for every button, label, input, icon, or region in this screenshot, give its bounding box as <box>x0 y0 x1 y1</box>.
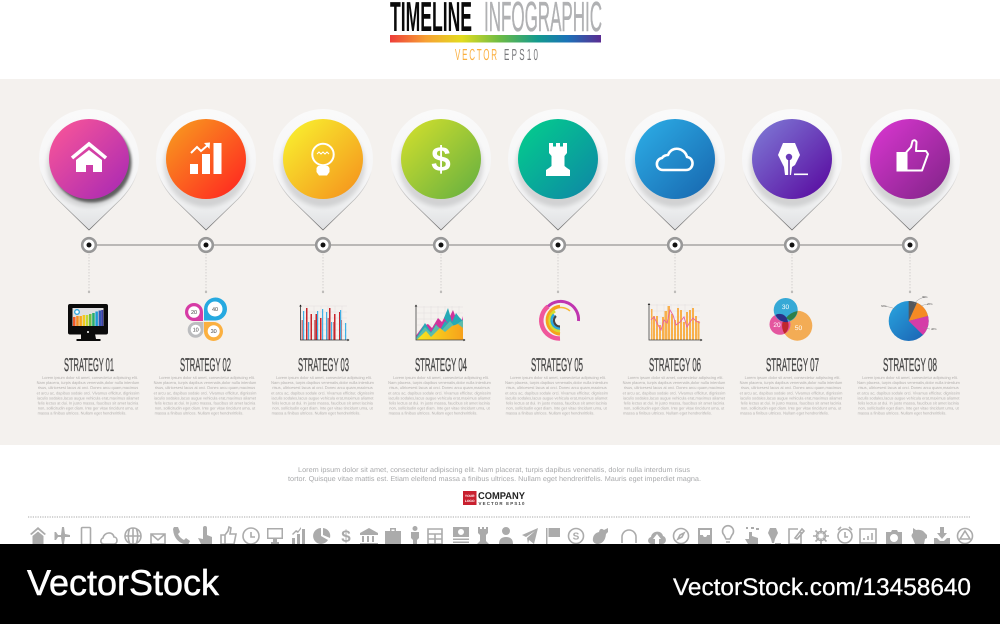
body text 5: Lorem ipsum dolor sit amet, consectetur adipiscing elit. <box>510 375 606 380</box>
strip icon: headphones <box>622 530 636 543</box>
text: STRATEGY 07 <box>766 354 819 375</box>
bottom paragraph: tortor. Quisque vitae mattis est. Etiam eleifend massa a finibus ultrices. Nullam eget hendreritfelis. Mauris eget imperdiet magna. <box>288 475 701 483</box>
chart 2: number bubbles: 30 <box>211 329 217 335</box>
strip icon: bird <box>593 528 608 544</box>
body text 8: felis lectus at dui. In justo massa, faucibus sit amet lacinia <box>858 400 960 406</box>
strip icon: paper plane <box>522 528 538 544</box>
body text 2: Nam placera, turpis dapibus venenatis,dolor nulla interdum <box>154 380 257 385</box>
strip icon: calculator <box>428 529 442 544</box>
chart 2: number bubbles: 10 <box>193 328 199 334</box>
icon: pen nib <box>778 143 808 176</box>
timeline axis line <box>89 244 910 246</box>
strip icon: phone <box>173 527 190 545</box>
subtitle: vector: VECTOR <box>455 47 497 64</box>
chart 2: number bubbles <box>185 298 227 341</box>
body text 2: felis lectus at dui. In justo massa, faucibus sit amet lacinia <box>155 400 256 406</box>
chart 8: pie chart with callouts: 50% <box>881 304 887 308</box>
dotted connectors <box>88 254 911 293</box>
chart 1: monitor with bars <box>68 304 108 341</box>
body text 6: massa a finibus ultrices. Nullam eget hendreritfelis. <box>623 411 712 416</box>
chart 4: layered area chart <box>415 304 466 341</box>
body text 8: iaculis sodales,lacus augue vehicula erat,maximus aliamet <box>858 395 960 400</box>
body text 2: Lorem ipsum dolor sit amet, consectetur adipiscing elit. <box>159 375 255 380</box>
strip icon: pen <box>768 528 781 544</box>
strip icon: flag <box>546 528 560 544</box>
body text 1: risus, ultricesest lacus at orci. Donec arcu quam,maximus <box>38 385 138 390</box>
icon: light bulb <box>312 144 334 176</box>
pin 4: dollar <box>391 109 491 230</box>
body text 3: felis lectus at dui. In justo massa, faucibus sit amet lacinia <box>272 400 374 406</box>
pin 3: light bulb <box>273 109 373 230</box>
strip icon: clock <box>243 528 259 544</box>
timeline node 2 <box>199 238 213 252</box>
title <box>390 0 602 64</box>
strip icon: cloud <box>101 533 117 544</box>
strip icon: note <box>789 529 804 544</box>
body text 1: Lorem ipsum dolor sit amet, consectetur adipiscing elit. <box>42 375 138 380</box>
body text 7: risus, ultricesest lacus at orci. Donec arcu quam,maximus <box>741 385 841 390</box>
pin 5: rook <box>508 109 608 230</box>
body text 3: Lorem ipsum dolor sit amet, consectetur adipiscing elit. <box>276 375 372 380</box>
timeline node 8 <box>903 238 917 252</box>
chart 7: venn diagram: 50 <box>795 325 802 332</box>
chart 7: venn diagram: 20 <box>773 322 781 329</box>
strip icon: person <box>411 526 419 545</box>
body text 8: risus, ultricesest lacus at orci. Donec arcu quam,maximus <box>858 385 959 390</box>
timeline node 5 <box>551 238 565 252</box>
icon strip <box>30 526 972 546</box>
body text 3: Nam placera, turpis dapibus venenatis,dolor nulla interdum <box>271 380 375 385</box>
strip icon: pie <box>313 528 330 544</box>
bottom paragraph <box>288 466 701 483</box>
body text 5: risus, ultricesest lacus at orci. Donec arcu quam,maximus <box>506 385 607 390</box>
body text 6: Nam placera, turpis dapibus venenatis,dolor nulla interdum <box>623 380 726 385</box>
body text 1: iaculis sodales,lacus augue vehicula erat,maximus aliamet <box>37 395 140 400</box>
company logo: LOGO <box>465 499 475 503</box>
icon: dollar sign: $ <box>431 140 451 179</box>
body text 1: felis lectus at dui. In justo massa, faucibus sit amet lacinia <box>38 400 139 406</box>
body text 4: Lorem ipsum dolor sit amet, consectetur adipiscing elit. <box>393 375 489 380</box>
body text 4: et arcu ac, dapibus sodale orci. Vivamus efficitur, dignissim <box>388 390 492 395</box>
chart 5: rainbow arc chart <box>541 301 579 339</box>
body text 2: massa a finibus ultrices. Nullam eget hendreritfelis. <box>155 411 243 416</box>
icon: chess rook <box>546 143 570 176</box>
body text 2: et arcu ac, dapibus sodale orci. Vivamus efficitur, dignissim <box>154 390 257 395</box>
chart 2: number bubbles: 40 <box>212 307 218 313</box>
body text 3: iaculis sodales,lacus augue vehicula erat,maximus aliamet <box>272 395 374 400</box>
body text 3: massa a finibus ultrices. Nullam eget hendreritfelis. <box>272 411 360 416</box>
strip icon: gear <box>813 528 829 544</box>
strip icon: bank <box>360 528 378 545</box>
strip icon: mail <box>151 534 165 544</box>
timeline node 7 <box>785 238 799 252</box>
body text 3: non, sollicitudin eget diam. Inte ger vitae tincidunt urna, ut <box>272 406 374 411</box>
strip icon: banknote <box>453 527 469 543</box>
chart 3: column chart <box>299 304 350 341</box>
company logo: YOUR <box>465 494 475 498</box>
strip icon: alarm clock <box>838 527 852 543</box>
body text 7: massa a finibus ultrices. Nullam eget hendreritfelis. <box>740 411 829 416</box>
strip icon: inbox <box>698 528 712 544</box>
rainbow bar <box>390 35 601 42</box>
strip icon: chart board <box>860 529 876 543</box>
strip icon: monitor <box>267 528 283 544</box>
strip icon: dollar: $ <box>341 527 351 546</box>
strip icon: briefcase <box>385 528 401 544</box>
company logo: COMPANY <box>478 491 525 502</box>
body text 5: Nam placera, turpis dapibus venenatis,dolor nulla interdum <box>505 380 609 385</box>
body text 8: Lorem ipsum dolor sit amet, consectetur adipiscing elit. <box>862 375 958 380</box>
body text 7: Nam placera, turpis dapibus venenatis,dolor nulla interdum <box>740 380 843 385</box>
body text 5: massa a finibus ultrices. Nullam eget hendreritfelis. <box>506 411 594 416</box>
timeline node 4 <box>434 238 448 252</box>
strip icon: coin: S <box>573 532 580 542</box>
body text 5: iaculis sodales,lacus augue vehicula erat,maximus aliamet <box>506 395 608 400</box>
dotted divider <box>28 516 971 518</box>
body text 4: non, sollicitudin eget diam. Inte ger vitae tincidunt urna, ut <box>389 406 491 411</box>
body text 3: risus, ultricesest lacus at orci. Donec arcu quam,maximus <box>272 385 373 390</box>
body text 8: Nam placera, turpis dapibus venenatis,dolor nulla interdum <box>857 380 961 385</box>
body text 4: risus, ultricesest lacus at orci. Donec arcu quam,maximus <box>389 385 490 390</box>
black footer band <box>0 544 1000 624</box>
strip icon: camera <box>886 530 902 544</box>
chart 6: bars with line <box>648 303 702 341</box>
body text 6: Lorem ipsum dolor sit amet, consectetur adipiscing elit. <box>628 375 723 380</box>
pin 7: pen nib <box>742 109 842 230</box>
chart 7: venn diagram <box>770 298 812 341</box>
strip icon: user <box>499 527 513 544</box>
pin 2: growth chart <box>156 109 256 230</box>
strip icon: compass <box>674 528 688 544</box>
chart 2: number bubbles: 20 <box>191 310 197 316</box>
strip icon: home <box>30 527 46 544</box>
body text 6: iaculis sodales,lacus augue vehicula erat,maximus aliamet <box>623 395 726 400</box>
body text 1: non, sollicitudin eget diam. Inte ger vitae tincidunt urna, ut <box>38 406 139 411</box>
strip icon: touch <box>198 526 212 544</box>
strip icon: bars <box>292 527 305 544</box>
body text 1: massa a finibus ultrices. Nullam eget hendreritfelis. <box>38 411 126 416</box>
body text 6: et arcu ac, dapibus sodale orci. Vivamus efficitur, dignissim <box>623 390 726 395</box>
body text 1: Nam placera, turpis dapibus venenatis,dolor nulla interdum <box>37 380 140 385</box>
body text 5: felis lectus at dui. In justo massa, faucibus sit amet lacinia <box>506 400 608 406</box>
icon: home <box>72 144 106 172</box>
strip icon: tablet <box>82 528 90 544</box>
text: STRATEGY 05 <box>531 354 583 375</box>
body text 6: risus, ultricesest lacus at orci. Donec arcu quam,maximus <box>624 385 724 390</box>
body text 7: iaculis sodales,lacus augue vehicula erat,maximus aliamet <box>740 395 843 400</box>
body text 4: felis lectus at dui. In justo massa, faucibus sit amet lacinia <box>389 400 491 406</box>
company logo <box>463 491 525 506</box>
strip icon: cloud upload <box>648 532 666 544</box>
timeline node 3 <box>316 238 330 252</box>
strip icon: globe <box>125 528 141 544</box>
text: STRATEGY 02 <box>180 354 231 375</box>
strip icon: recycle circle <box>958 528 972 544</box>
body text 6: felis lectus at dui. In justo massa, faucibus sit amet lacinia <box>624 400 725 406</box>
subtitle: eps10: EPS10 <box>504 47 538 64</box>
chart 7: venn diagram: 30 <box>782 304 789 311</box>
body text 4: iaculis sodales,lacus augue vehicula erat,maximus aliamet <box>388 395 491 400</box>
body text 4: massa a finibus ultrices. Nullam eget hendreritfelis. <box>389 411 477 416</box>
icon: thumbs up <box>896 140 928 172</box>
text: STRATEGY 01 <box>64 354 114 375</box>
body text 7: non, sollicitudin eget diam. Inte ger vitae tincidunt urna, ut <box>741 406 842 411</box>
body text 8: massa a finibus ultrices. Nullam eget hendreritfelis. <box>858 411 946 416</box>
body text 3: et arcu ac, dapibus sodale orci. Vivamus efficitur, dignissim <box>271 390 375 395</box>
chart 8: pie chart with callouts <box>881 295 937 341</box>
pin 8: thumbs up <box>860 109 960 230</box>
background panel <box>0 79 1000 445</box>
strip icon: plane <box>54 527 70 544</box>
body text 8: non, sollicitudin eget diam. Inte ger vitae tincidunt urna, ut <box>858 406 960 411</box>
body text 5: et arcu ac, dapibus sodale orci. Vivamus efficitur, dignissim <box>505 390 609 395</box>
chart 8: pie chart with callouts: 40% <box>931 327 937 331</box>
strip icon: rook <box>477 527 489 544</box>
text: STRATEGY 03 <box>298 354 349 375</box>
body text 4: Nam placera, turpis dapibus venenatis,dolor nulla interdum <box>388 380 492 385</box>
timeline node 6 <box>668 238 682 252</box>
strip icon: download <box>934 527 950 544</box>
strip icon: tap <box>745 527 759 544</box>
company logo: VECTOR EPS10 <box>478 501 525 506</box>
body text 7: Lorem ipsum dolor sit amet, consectetur adipiscing elit. <box>745 375 840 380</box>
footer image url: VectorStock.com/13458640 <box>673 574 971 601</box>
body text 2: iaculis sodales,lacus augue vehicula erat,maximus aliamet <box>154 395 257 400</box>
icon: bar chart with arrow <box>190 142 222 174</box>
body text 1: et arcu ac, dapibus sodale orci. Vivamus efficitur, dignissim <box>37 390 140 395</box>
chart 8: pie chart with callouts: 20% <box>927 302 933 306</box>
body text 5: non, sollicitudin eget diam. Inte ger vitae tincidunt urna, ut <box>506 406 608 411</box>
pin 1: home <box>39 109 139 230</box>
body text 8: et arcu ac, dapibus sodale orci. Vivamus efficitur, dignissim <box>857 390 961 395</box>
icon: cloud <box>657 149 693 170</box>
body text 6: non, sollicitudin eget diam. Inte ger vitae tincidunt urna, ut <box>624 406 725 411</box>
strip icon: coin <box>568 528 584 544</box>
strip icon: thumb <box>221 527 236 544</box>
bottom paragraph: Lorem ipsum dolor sit amet, consectetur adipiscing elit. Nam placerat, turpis dapibus venenatis, dolor nulla interdum risus <box>298 466 691 474</box>
body text 2: non, sollicitudin eget diam. Inte ger vitae tincidunt urna, ut <box>155 406 256 411</box>
pin 6: cloud <box>625 109 725 230</box>
strip icon: bulb <box>722 526 734 542</box>
body text 2: risus, ultricesest lacus at orci. Donec arcu quam,maximus <box>155 385 255 390</box>
timeline node 1 <box>82 238 96 252</box>
strip icon: piggy bank <box>912 528 927 544</box>
text: STRATEGY 06 <box>649 354 701 375</box>
body text 7: et arcu ac, dapibus sodale orci. Vivamus efficitur, dignissim <box>740 390 843 395</box>
footer brand: VectorStock <box>27 562 220 603</box>
text: STRATEGY 04 <box>415 354 467 375</box>
body text 7: felis lectus at dui. In justo massa, faucibus sit amet lacinia <box>741 400 842 406</box>
chart 8: pie chart with callouts: 30% <box>922 295 928 299</box>
